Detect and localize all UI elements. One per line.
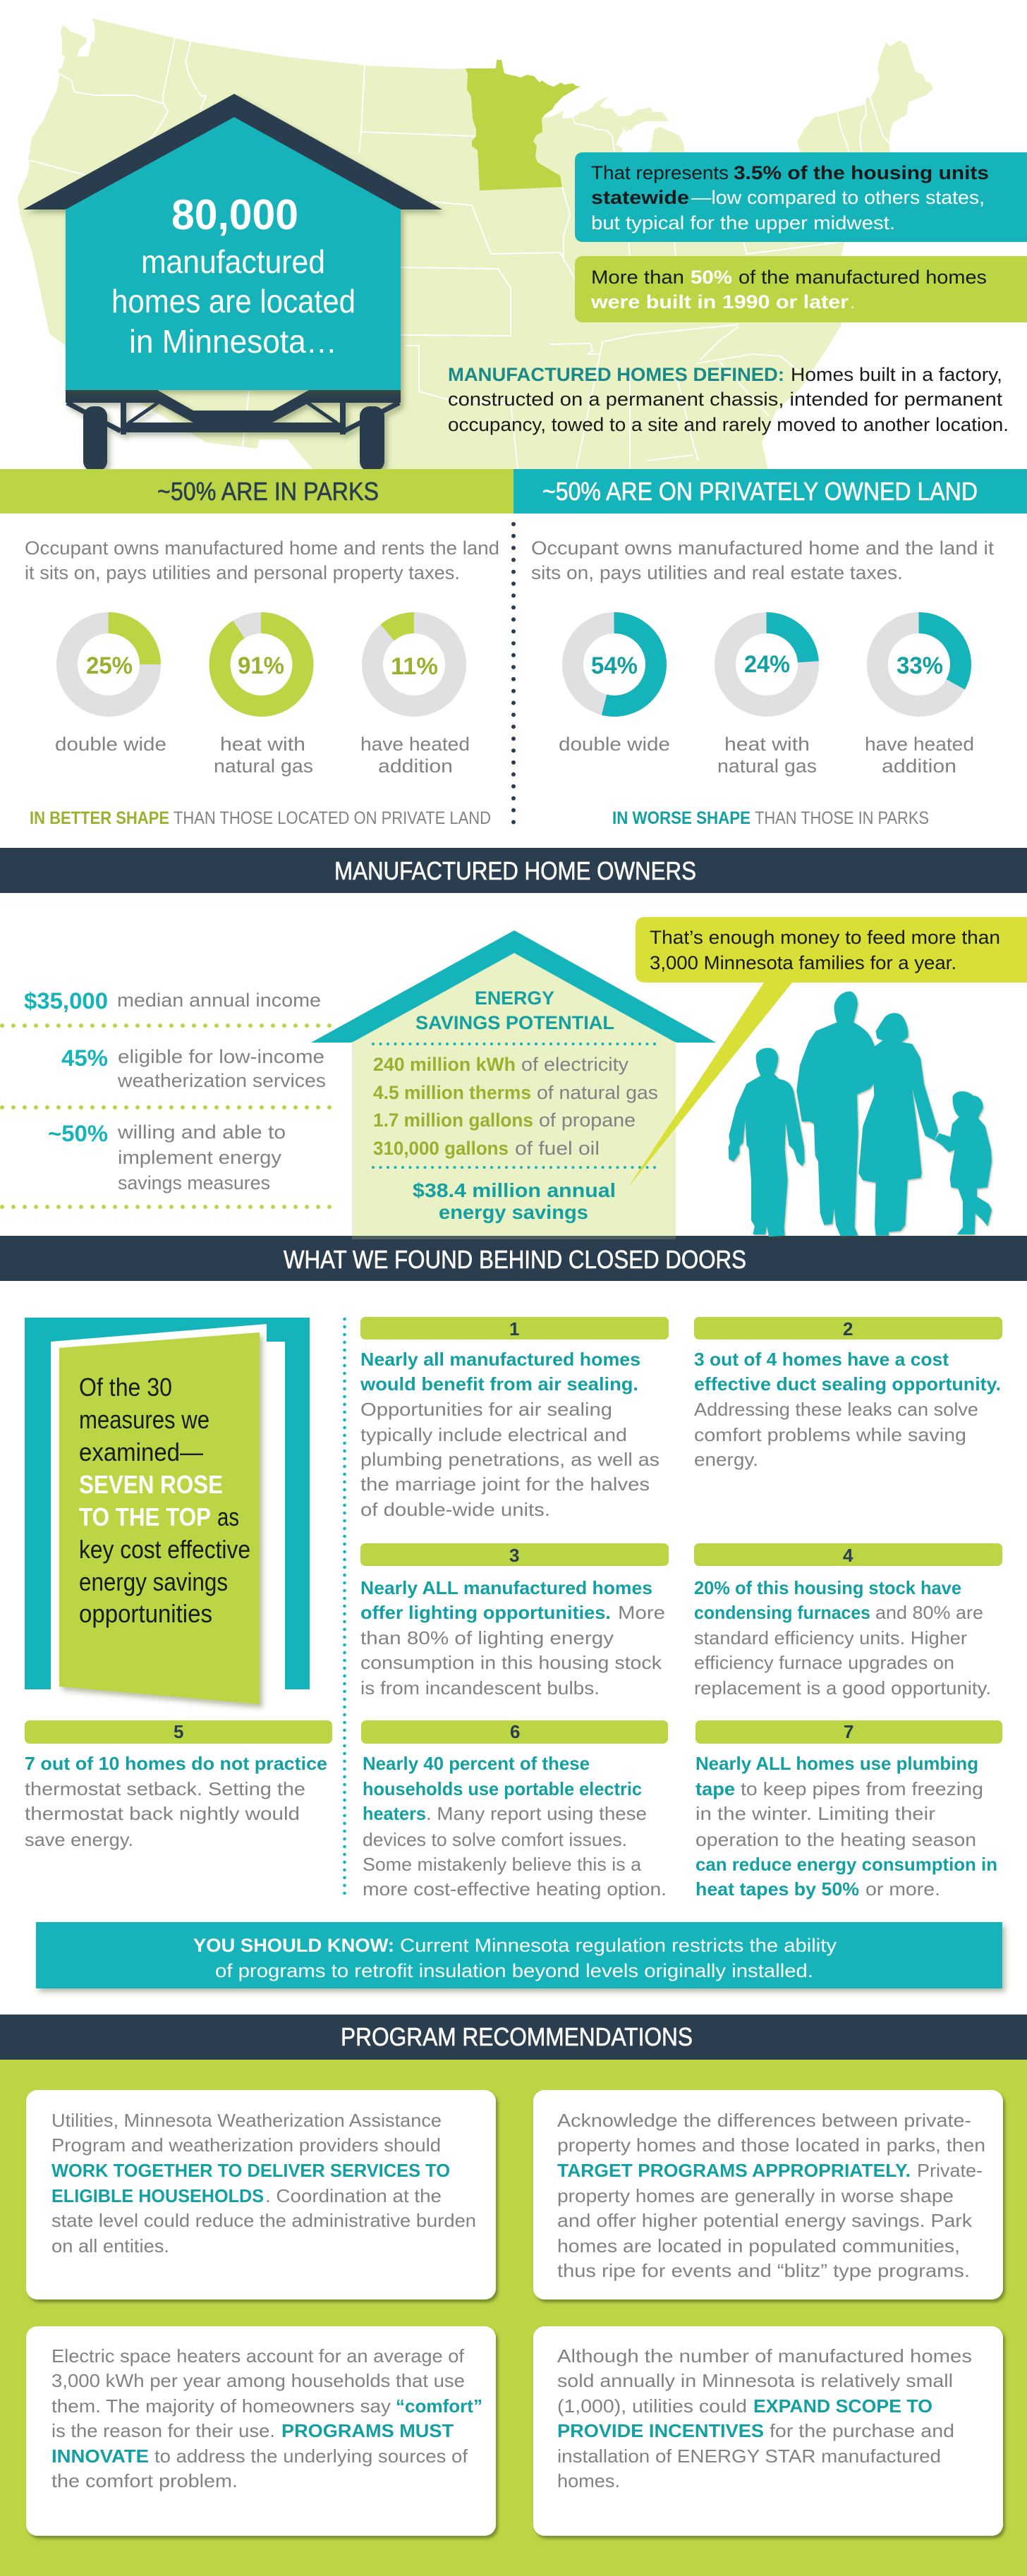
panel: private land description: sits on, pays utilities and real estate taxes. bbox=[531, 562, 903, 583]
icon: open door panel: Of the 30 bbox=[79, 1373, 172, 1402]
heading: what we found behind closed doors: WHAT WE FOUND BEHIND CLOSED DOORS bbox=[284, 1245, 746, 1274]
recommendation card 2: property homes are generally in worse shape bbox=[557, 2185, 954, 2206]
recommendation card 3: INNOVATE bbox=[51, 2446, 149, 2467]
recommendation card 2 bbox=[533, 2090, 1003, 2299]
house: energy savings potential: 4.5 million therms bbox=[373, 1082, 531, 1103]
recommendation card 2: TARGET PROGRAMS APPROPRIATELY. bbox=[557, 2160, 911, 2181]
house text: 80,000 bbox=[171, 191, 298, 238]
recommendation card 3: them. The majority of homeowners say bbox=[51, 2395, 391, 2417]
text block: manufactured homes defined: constructed on a permanent chassis, intended for permanent bbox=[448, 389, 1003, 410]
conclusion: private land bbox=[612, 808, 929, 828]
house: energy savings potential bbox=[311, 930, 716, 1239]
callout: 50% built in 1990 or later: of the manufactured homes bbox=[739, 267, 987, 288]
finding 6: devices to solve comfort issues. bbox=[363, 1829, 627, 1850]
finding 5: thermostat setback. Setting the bbox=[25, 1778, 305, 1799]
finding 2: Addressing these leaks can solve bbox=[694, 1399, 978, 1420]
icon: family silhouette bbox=[729, 991, 992, 1237]
recommendation card 3: the comfort problem. bbox=[51, 2470, 238, 2491]
callout: you should know: of programs to retrofit insulation beyond levels originally installed. bbox=[215, 1960, 813, 1981]
callout: you should know: YOU SHOULD KNOW: bbox=[193, 1935, 394, 1956]
panel: parks description bbox=[25, 537, 499, 583]
recommendation card 4: EXPAND SCOPE TO bbox=[753, 2395, 932, 2417]
finding 7: Nearly ALL homes use plumbing bbox=[695, 1753, 978, 1774]
icon: open door panel: as bbox=[217, 1502, 239, 1531]
conclusion: parks bbox=[30, 808, 491, 828]
icon: open door panel: SEVEN ROSE bbox=[79, 1470, 223, 1499]
donut: private double wide 54%: double wide bbox=[559, 734, 670, 755]
icon: open door panel bbox=[25, 1318, 310, 1704]
finding 5: 7 out of 10 homes do not practice bbox=[25, 1753, 327, 1774]
finding 1: 1 bbox=[509, 1318, 519, 1339]
recommendation card 3: “comfort” bbox=[396, 2395, 482, 2417]
donut: private heated addition 33%: 33% bbox=[897, 652, 943, 679]
finding 3: than 80% of lighting energy bbox=[360, 1627, 614, 1648]
panel heading: in parks bbox=[0, 469, 514, 514]
house graphic: 80,000 manufactured homes bbox=[23, 94, 442, 471]
text block: manufactured homes defined bbox=[448, 364, 1009, 435]
callout: 3.5% of housing units: statewide bbox=[591, 187, 689, 208]
recommendation card 1 bbox=[26, 2090, 496, 2299]
finding 5: thermostat back nightly would bbox=[25, 1803, 300, 1824]
heading: manufactured home owners bbox=[0, 848, 1027, 893]
recommendation card 3: PROGRAMS MUST bbox=[281, 2420, 454, 2441]
callout: 50% built in 1990 or later: were built in 1990 or later bbox=[590, 291, 849, 312]
icon: open door panel: energy savings bbox=[79, 1567, 228, 1596]
finding 1 bbox=[360, 1317, 669, 1520]
donut: private natural gas 24%: natural gas bbox=[717, 755, 817, 777]
finding 7: operation to the heating season bbox=[695, 1829, 976, 1850]
callout: you should know bbox=[36, 1922, 1002, 1988]
finding 1: Opportunities for air sealing bbox=[360, 1399, 612, 1420]
recommendation card 4: installation of ENERGY STAR manufactured bbox=[557, 2446, 941, 2467]
icon: open door panel: measures we bbox=[79, 1405, 209, 1434]
recommendation card 3: to address the underlying sources of bbox=[154, 2446, 468, 2467]
house: energy savings potential: SAVINGS POTENTIAL bbox=[415, 1012, 614, 1033]
house: energy savings potential: $38.4 million annual bbox=[413, 1179, 616, 1201]
panel: parks description: Occupant owns manufactured home and rents the land bbox=[25, 537, 499, 559]
finding 7: tape bbox=[695, 1778, 735, 1799]
finding 3: 3 bbox=[509, 1545, 519, 1566]
house text: manufactured bbox=[141, 243, 325, 280]
recommendation card 3: is the reason for their use. bbox=[51, 2420, 275, 2441]
callout: 3.5% of housing units: —low compared to others states, bbox=[691, 187, 985, 208]
text block: manufactured homes defined: MANUFACTURED HOMES DEFINED: bbox=[448, 364, 784, 385]
donut: parks double wide 25% bbox=[55, 623, 166, 755]
callout: you should know: Current Minnesota regulation restricts the ability bbox=[400, 1935, 837, 1956]
recommendation card 2: property homes and those located in parks, then bbox=[557, 2134, 985, 2156]
finding 3 bbox=[360, 1543, 669, 1699]
finding 7: to keep pipes from freezing bbox=[741, 1778, 983, 1799]
finding 4: efficiency furnace upgrades on bbox=[694, 1652, 954, 1673]
finding 2: 2 bbox=[843, 1318, 853, 1339]
heading: what we found behind closed doors bbox=[0, 1236, 1027, 1281]
panel heading: in parks: ~50% ARE IN PARKS bbox=[157, 477, 379, 506]
callout: feed 3,000 families: 3,000 Minnesota families for a year. bbox=[650, 952, 956, 973]
recommendation card 4 bbox=[533, 2326, 1003, 2536]
finding 4: condensing furnaces bbox=[694, 1602, 870, 1623]
recommendation card 1: Utilities, Minnesota Weatherization Assistance bbox=[51, 2110, 442, 2131]
callout: 3.5% of housing units: That represents bbox=[591, 162, 729, 183]
recommendation card 1: on all entities. bbox=[51, 2235, 169, 2256]
finding 6: more cost-effective heating option. bbox=[363, 1878, 667, 1900]
icon: open door panel: opportunities bbox=[79, 1599, 212, 1628]
panel: recommendations background bbox=[0, 2060, 1027, 2576]
wheels and chassis bbox=[66, 390, 401, 471]
donut: parks double wide 25%: double wide bbox=[55, 734, 166, 755]
finding 6 bbox=[361, 1720, 668, 1900]
recommendation card 2: and offer higher potential energy savings. Park bbox=[557, 2210, 973, 2231]
Minnesota highlighted on map bbox=[466, 60, 581, 190]
house text bbox=[111, 191, 356, 360]
callout: 3.5% of housing units bbox=[575, 152, 1027, 242]
finding 6: 6 bbox=[510, 1721, 520, 1742]
donut: private heated addition 33%: have heated bbox=[865, 734, 974, 755]
callout: 3.5% of housing units: 3.5% of the housing units bbox=[734, 162, 989, 183]
callout: 50% built in 1990 or later: . bbox=[850, 291, 855, 312]
roof and body bbox=[23, 94, 442, 390]
recommendation card 4: for the purchase and bbox=[770, 2420, 954, 2441]
finding 2: comfort problems while saving bbox=[694, 1424, 966, 1445]
finding 6: heaters bbox=[363, 1803, 426, 1824]
stat: median income: $35,000 bbox=[24, 988, 108, 1014]
finding 3: consumption in this housing stock bbox=[360, 1652, 662, 1673]
finding 5: save energy. bbox=[25, 1829, 133, 1850]
heading: program recommendations: PROGRAM RECOMMENDATIONS bbox=[341, 2022, 693, 2051]
conclusion: parks: THAN THOSE LOCATED ON PRIVATE LAND bbox=[174, 808, 491, 828]
recommendation card 3: Electric space heaters account for an average of bbox=[51, 2345, 465, 2367]
stat: eligible for weatherization bbox=[61, 1045, 326, 1091]
finding 1: the marriage joint for the halves bbox=[360, 1474, 650, 1495]
house: energy savings potential: of propane bbox=[539, 1110, 636, 1131]
donut: private heated addition 33%: addition bbox=[882, 755, 956, 777]
map of the United States bbox=[18, 18, 933, 473]
recommendation card 4: (1,000), utilities could bbox=[557, 2395, 747, 2417]
house: energy savings potential: of fuel oil bbox=[515, 1138, 600, 1159]
finding 2 bbox=[694, 1317, 1002, 1470]
finding 6: households use portable electric bbox=[363, 1778, 642, 1799]
donut: parks natural gas 91%: heat with bbox=[220, 734, 305, 755]
finding 4: 20% of this housing stock have bbox=[694, 1577, 961, 1598]
house: energy savings potential: 1.7 million gallons bbox=[373, 1110, 533, 1131]
house: energy savings potential: 240 million kWh bbox=[373, 1054, 516, 1075]
finding 6: Nearly 40 percent of these bbox=[363, 1753, 590, 1774]
stat: willing and able: ~50% bbox=[48, 1121, 108, 1146]
icon: open door panel: TO THE TOP bbox=[79, 1502, 211, 1531]
callout: 50% built in 1990 or later: More than bbox=[591, 267, 684, 288]
house: energy savings potential: energy savings bbox=[439, 1201, 588, 1223]
finding 7: 7 bbox=[844, 1721, 853, 1742]
house: energy savings potential: 310,000 gallons bbox=[373, 1138, 509, 1159]
finding 1: typically include electrical and bbox=[360, 1424, 627, 1445]
text block: manufactured homes defined: Homes built in a factory, bbox=[791, 364, 1002, 385]
finding 4: replacement is a good opportunity. bbox=[694, 1677, 991, 1699]
stat: median income: median annual income bbox=[117, 990, 321, 1011]
donut: parks natural gas 91%: 91% bbox=[238, 652, 284, 679]
finding 2: 3 out of 4 homes have a cost bbox=[694, 1349, 949, 1370]
donut: parks heated addition 11%: 11% bbox=[391, 653, 438, 680]
finding 2: energy. bbox=[694, 1449, 758, 1470]
stat: willing and able: implement energy bbox=[118, 1147, 282, 1168]
stat: median income bbox=[24, 988, 321, 1014]
recommendation card 1: ELIGIBLE HOUSEHOLDS bbox=[51, 2185, 264, 2206]
recommendation card 4: PROVIDE INCENTIVES bbox=[557, 2420, 764, 2441]
finding 3: Nearly ALL manufactured homes bbox=[360, 1577, 652, 1598]
recommendation card 1: WORK TOGETHER TO DELIVER SERVICES TO bbox=[51, 2160, 450, 2181]
finding 3: offer lighting opportunities. bbox=[360, 1602, 611, 1623]
finding 3: is from incandescent bulbs. bbox=[360, 1677, 600, 1699]
callout: 50% built in 1990 or later: 50% bbox=[691, 267, 732, 288]
finding 7: in the winter. Limiting their bbox=[695, 1803, 935, 1824]
finding 6: . Many report using these bbox=[426, 1803, 647, 1824]
recommendation card 2: Private- bbox=[917, 2160, 983, 2181]
text block: manufactured homes defined: occupancy, towed to a site and rarely moved to another location. bbox=[448, 414, 1009, 435]
callout: feed 3,000 families bbox=[628, 917, 1027, 1188]
finding 7 bbox=[695, 1720, 1002, 1900]
donut: parks natural gas 91% bbox=[214, 623, 313, 777]
finding 7: or more. bbox=[865, 1878, 940, 1900]
recommendation card 2: homes are located in populated communities, bbox=[557, 2235, 960, 2256]
stat: willing and able bbox=[48, 1121, 286, 1193]
stat: willing and able: savings measures bbox=[118, 1172, 270, 1193]
finding 4 bbox=[694, 1543, 1002, 1699]
recommendation card 2: thus ripe for events and “blitz” type programs. bbox=[557, 2260, 970, 2281]
panel heading: on privately owned land: ~50% ARE ON PRIVATELY OWNED LAND bbox=[542, 477, 978, 506]
finding 4: and 80% are bbox=[875, 1602, 983, 1623]
recommendation card 4: sold annually in Minnesota is relatively small bbox=[557, 2370, 953, 2391]
house text: homes are located bbox=[111, 283, 356, 320]
house: energy savings potential: of natural gas bbox=[537, 1082, 658, 1103]
stat: willing and able: willing and able to bbox=[117, 1122, 286, 1143]
donut: parks natural gas 91%: natural gas bbox=[214, 755, 313, 777]
recommendation card 3 bbox=[26, 2326, 496, 2536]
donut: private natural gas 24%: heat with bbox=[724, 734, 810, 755]
icon: open door panel: examined— bbox=[79, 1438, 203, 1466]
donut: private natural gas 24% bbox=[717, 623, 817, 777]
donut: private double wide 54%: 54% bbox=[591, 652, 638, 679]
icon: open door panel: key cost effective bbox=[79, 1535, 250, 1564]
stat: eligible for weatherization: 45% bbox=[61, 1045, 108, 1071]
recommendation card 4: Although the number of manufactured homes bbox=[557, 2345, 972, 2367]
donut: private natural gas 24%: 24% bbox=[744, 651, 790, 678]
stat: eligible for weatherization: weatherization services bbox=[117, 1070, 326, 1091]
heading: manufactured home owners: MANUFACTURED HOME OWNERS bbox=[334, 856, 696, 885]
donut: private heated addition 33% bbox=[865, 623, 974, 777]
callout: 3.5% of housing units: but typical for the upper midwest. bbox=[591, 212, 895, 233]
house: energy savings potential: ENERGY bbox=[475, 988, 554, 1009]
recommendation card 4: homes. bbox=[557, 2470, 620, 2491]
finding 4: 4 bbox=[843, 1545, 853, 1566]
finding 7: can reduce energy consumption in bbox=[695, 1854, 997, 1875]
panel: parks description: it sits on, pays utilities and personal property taxes. bbox=[25, 562, 460, 583]
finding 3: More bbox=[618, 1602, 665, 1623]
recommendation card 1: . Coordination at the bbox=[265, 2185, 442, 2206]
finding 1: plumbing penetrations, as well as bbox=[360, 1449, 660, 1470]
panel: private land description bbox=[531, 537, 995, 583]
house text: in Minnesota… bbox=[129, 323, 337, 360]
donut: private double wide 54% bbox=[559, 623, 670, 755]
house: energy savings potential: of electricity bbox=[521, 1054, 629, 1075]
donut: parks heated addition 11%: have heated bbox=[360, 734, 470, 755]
conclusion: parks: IN BETTER SHAPE bbox=[30, 808, 169, 828]
stat: eligible for weatherization: eligible for low-income bbox=[118, 1046, 324, 1067]
donut: parks double wide 25%: 25% bbox=[86, 652, 133, 679]
heading: program recommendations bbox=[0, 2015, 1027, 2060]
conclusion: private land: THAN THOSE IN PARKS bbox=[755, 808, 929, 828]
finding 1: Nearly all manufactured homes bbox=[360, 1349, 640, 1370]
finding 2: effective duct sealing opportunity. bbox=[694, 1373, 1001, 1395]
finding 5 bbox=[25, 1720, 332, 1850]
callout: feed 3,000 families: That’s enough money to feed more than bbox=[650, 927, 1000, 948]
finding 1: of double-wide units. bbox=[360, 1499, 550, 1520]
finding 1: would benefit from air sealing. bbox=[360, 1373, 638, 1395]
recommendation card 1: Program and weatherization providers should bbox=[51, 2134, 441, 2156]
donut: parks heated addition 11%: addition bbox=[378, 755, 453, 777]
recommendation card 1: state level could reduce the administrative burden bbox=[51, 2210, 476, 2231]
recommendation card 2: Acknowledge the differences between private- bbox=[557, 2110, 971, 2131]
callout: 50% built in 1990 or later bbox=[575, 256, 1027, 322]
finding 7: heat tapes by 50% bbox=[695, 1878, 859, 1900]
finding 4: standard efficiency units. Higher bbox=[694, 1627, 967, 1648]
finding 6: Some mistakenly believe this is a bbox=[363, 1854, 642, 1875]
finding 5: 5 bbox=[174, 1721, 183, 1742]
recommendation card 3: 3,000 kWh per year among households that use bbox=[51, 2370, 465, 2391]
panel heading: on privately owned land bbox=[514, 469, 1027, 514]
conclusion: private land: IN WORSE SHAPE bbox=[612, 808, 750, 828]
donut: parks heated addition 11% bbox=[356, 606, 473, 777]
panel: private land description: Occupant owns manufactured home and the land it bbox=[531, 537, 995, 559]
